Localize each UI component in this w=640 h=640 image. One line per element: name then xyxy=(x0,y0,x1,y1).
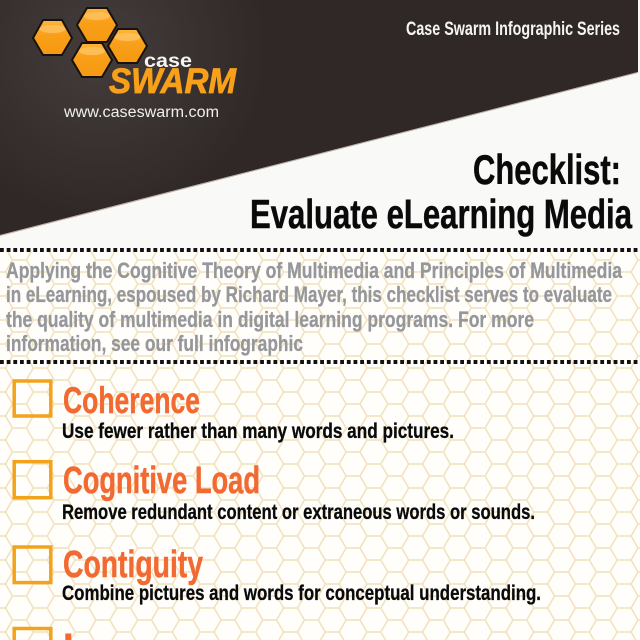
dotted divider xyxy=(0,360,640,364)
logo word: SWARM: SWARM xyxy=(109,62,237,101)
intro paragraph xyxy=(6,258,623,356)
checkbox xyxy=(14,547,51,583)
intro paragraph: information, see our full infographic xyxy=(6,331,303,356)
dark diagonal header banner xyxy=(0,0,638,236)
checkbox xyxy=(14,628,51,640)
website address: www.caseswarm.com xyxy=(63,104,219,121)
checklist item: Coherence xyxy=(14,380,454,443)
logo word: case: case xyxy=(144,51,192,72)
checkbox xyxy=(14,381,51,416)
title xyxy=(250,146,633,237)
checklist item: cropped fourth item xyxy=(14,627,86,640)
dotted divider xyxy=(0,248,640,252)
checklist item: Contiguity xyxy=(14,544,541,605)
heading: Coherence xyxy=(63,380,200,421)
logo: Case Swarm xyxy=(33,8,237,121)
checklist item: Cognitive Load xyxy=(14,460,535,524)
icon: cell highlights xyxy=(40,12,140,55)
heading: Cognitive Load xyxy=(63,460,260,502)
icon: honeycomb cells xyxy=(33,8,147,77)
description: Use fewer rather than many words and pictures. xyxy=(62,420,454,443)
heading: Contiguity xyxy=(63,544,203,586)
checkbox xyxy=(14,462,51,498)
